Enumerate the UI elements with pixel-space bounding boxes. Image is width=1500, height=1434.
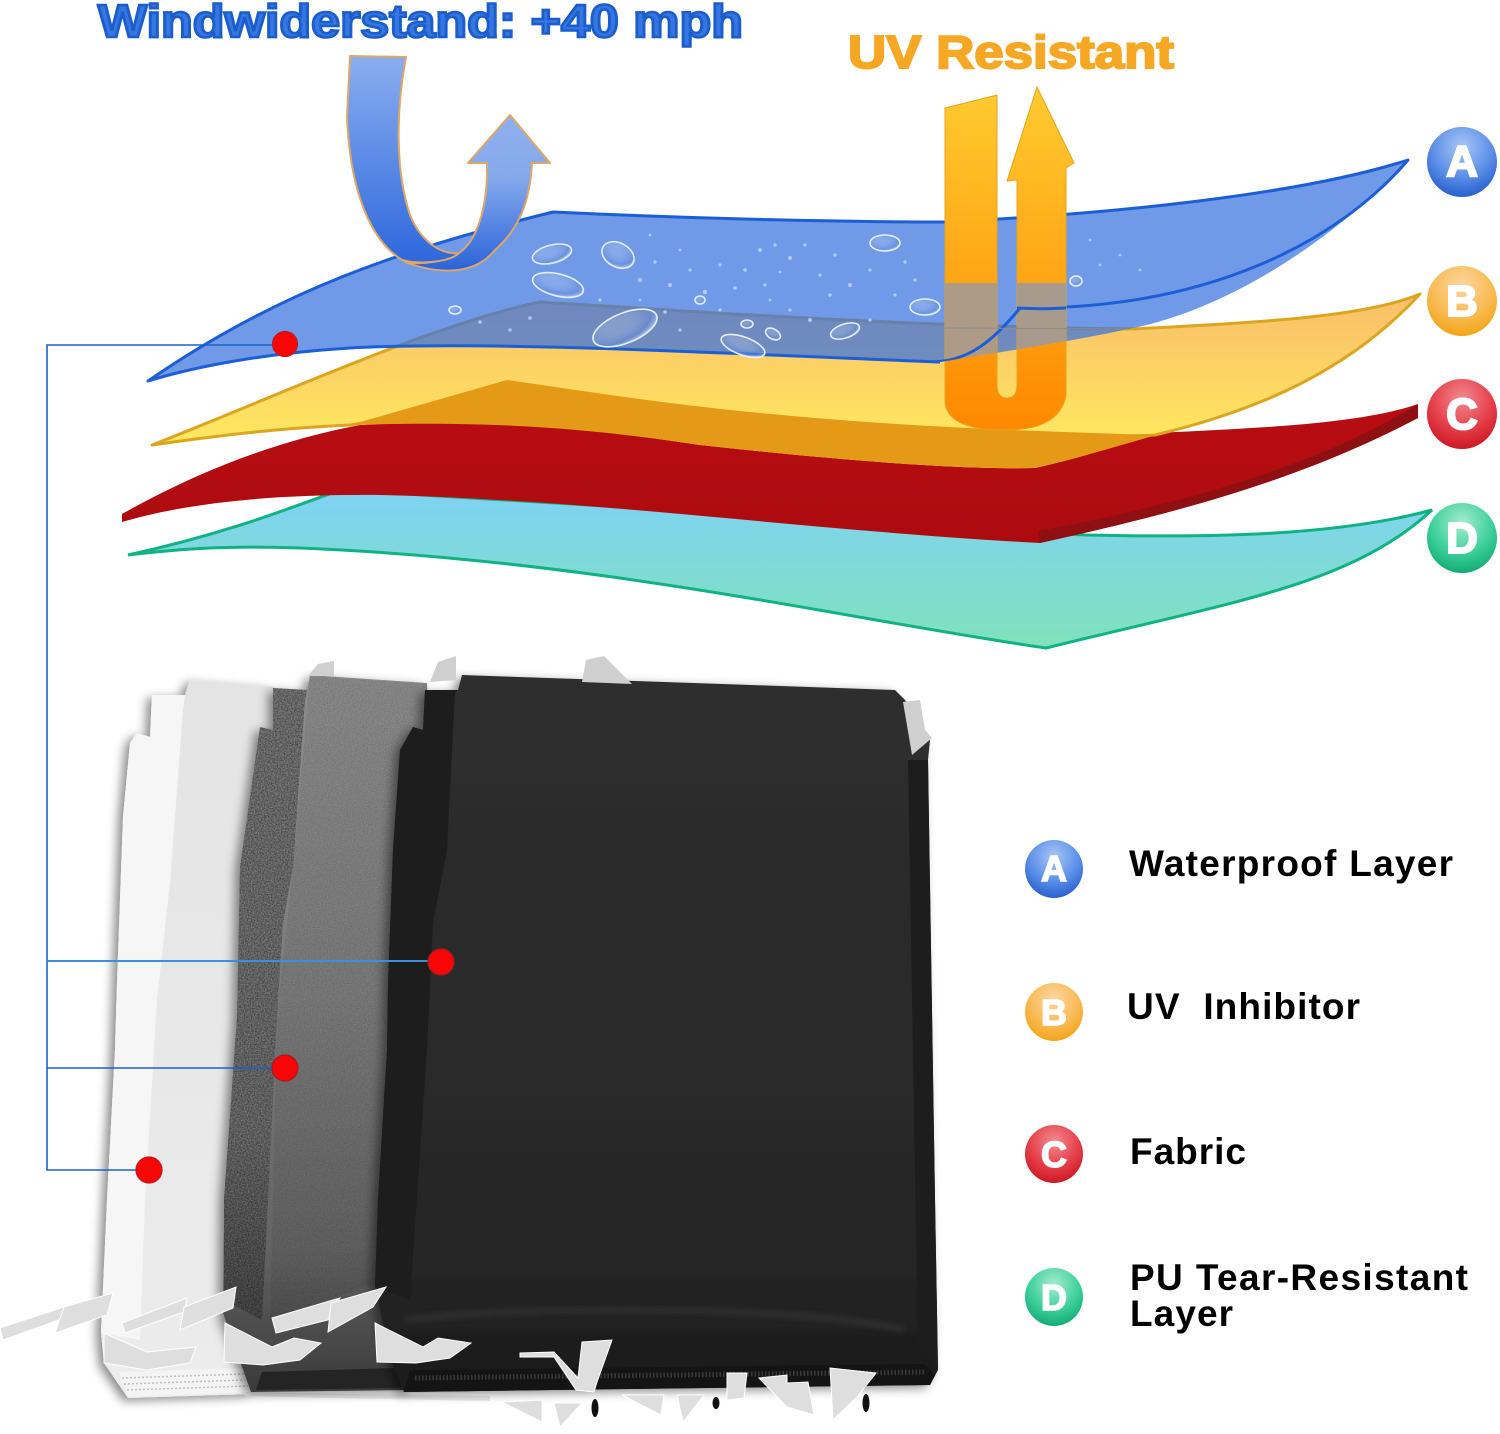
badge C: [1427, 379, 1497, 449]
legend item D: D: [1041, 1277, 1067, 1318]
white tabs on top of bags: [308, 656, 932, 755]
small water beads on layer A: [478, 234, 1141, 332]
legend item B: [1025, 983, 1360, 1041]
legend item C: C: [1041, 1134, 1067, 1175]
badge B: [1427, 266, 1497, 336]
water droplets on layer A: [449, 235, 1082, 362]
zipper pulls: [592, 1394, 870, 1417]
badge A: [1427, 127, 1497, 197]
layer D: PU tear-resistant sheet: [128, 490, 1432, 648]
legend item A: A: [1041, 848, 1067, 889]
wind arrow wrapping around the layer: [347, 56, 550, 271]
badge B: B: [1446, 277, 1478, 326]
badge D: D: [1446, 514, 1478, 563]
black fabric bag: [375, 675, 938, 1392]
legend item C: Fabric: [1130, 1131, 1246, 1172]
legend item B: B: [1041, 992, 1067, 1033]
legend item C: [1025, 1125, 1246, 1183]
badge C: C: [1446, 390, 1478, 439]
layer C: red fabric sheet: [122, 404, 1418, 543]
UV arrow passing through the layer: [930, 87, 1128, 430]
title: UV resistant: UV Resistant: [848, 26, 1174, 78]
badge D: [1427, 503, 1497, 573]
white fabric bag: [101, 680, 490, 1401]
layer A: waterproof sheet: [148, 160, 1408, 381]
white tabs along bottom of bags: [0, 1287, 876, 1427]
legend item D: Layer: [1130, 1293, 1233, 1334]
legend item B: UV Inhibitor: [1127, 986, 1360, 1027]
grey fabric bag: [223, 675, 450, 1392]
marker dot: white bag: [136, 1157, 162, 1183]
layer B: UV inhibitor sheet: [152, 294, 1420, 468]
legend item A: Waterproof Layer: [1129, 843, 1453, 884]
legend item A: [1025, 840, 1453, 898]
legend item D: [1025, 1257, 1468, 1334]
marker dot: layer: [272, 332, 298, 356]
legend item D: PU Tear-Resistant: [1130, 1257, 1468, 1298]
marker dot: grey bag: [272, 1055, 298, 1081]
leader lines connecting layer to bags: [47, 345, 430, 1170]
badge A: A: [1446, 137, 1478, 186]
marker dot: black bag: [428, 949, 454, 975]
